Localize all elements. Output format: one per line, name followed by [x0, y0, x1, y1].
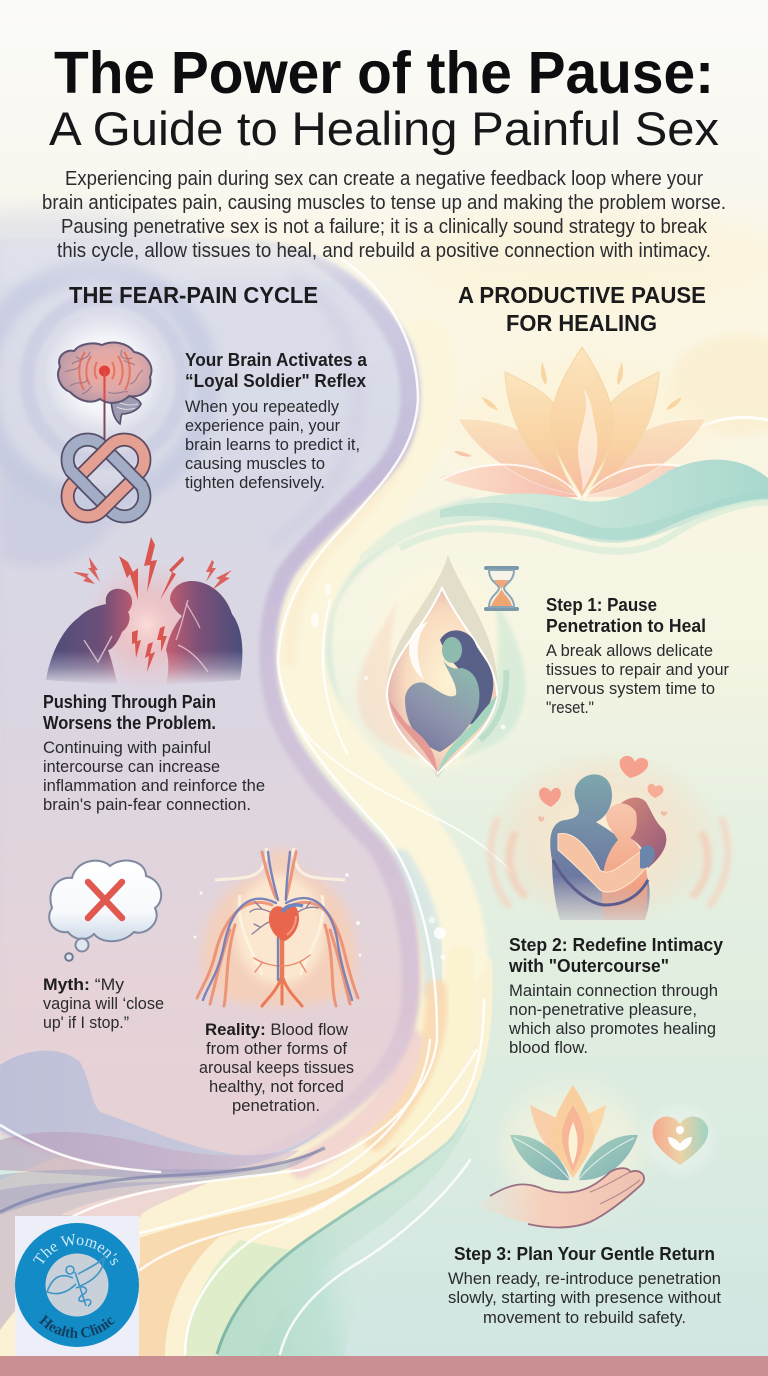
text: brain reflex: “Loyal Soldier" Reflex: [185, 371, 366, 391]
background: watercolor waves at panel foot: [0, 1132, 325, 1215]
text: brain reflex: [185, 350, 368, 492]
text: brain reflex: Your Brain Activates a: [185, 350, 368, 370]
heading: a productive pause for healing: FOR HEALING: [506, 310, 657, 336]
text: step 2: Step 2: Redefine Intimacy: [509, 935, 723, 955]
text: reality: penetration.: [232, 1096, 320, 1115]
text: pushing through pain: Continuing with painful: [43, 738, 211, 757]
icon: circulatory system with heart: [194, 848, 362, 1006]
text: pushing through pain: Pushing Through Pain: [43, 692, 216, 712]
text: myth: up' if I stop.”: [43, 1013, 129, 1032]
text: brain reflex: brain learns to predict it,: [185, 435, 360, 454]
text: step 3: [448, 1244, 721, 1327]
text: step 2: with "Outercourse": [508, 956, 669, 976]
text: reality: arousal keeps tissues: [199, 1058, 354, 1077]
text: step 1: Penetration to Heal: [546, 616, 706, 636]
text: pushing through pain: intercourse can increase: [43, 757, 220, 776]
text: pushing through pain: Worsens the Problem.: [43, 713, 216, 733]
icon: hourglass: [484, 566, 519, 611]
title: [49, 40, 719, 155]
icon: lotus flower with wave: [360, 347, 768, 565]
text: reality: healthy, not forced: [209, 1077, 344, 1096]
icon: woman in protective leaf: [357, 555, 525, 778]
text: step 3: movement to rebuild safety.: [483, 1308, 686, 1327]
text: step 3: slowly, starting with presence without: [448, 1288, 721, 1307]
background: cream and mint ribbon along the S-curve: [290, 345, 476, 1168]
icon: myth thought cloud with X: [49, 861, 161, 961]
heading: a productive pause for healing: A PRODUCTIVE PAUSE: [458, 282, 706, 308]
icon: brain with knot: [43, 313, 167, 525]
icon: heart with figure: [646, 1106, 714, 1174]
text: reality: from other forms of: [206, 1039, 347, 1058]
heading: a productive pause for healing: [458, 282, 706, 336]
logo: The Women's Health Clinic: The Women's: [32, 1234, 118, 1266]
text: brain reflex: causing muscles to: [185, 454, 325, 473]
text: step 1: [546, 595, 729, 717]
title: A Guide to Healing Painful Sex: [49, 102, 719, 155]
text: myth: [43, 975, 164, 1032]
background: teal edge stroke: [217, 1080, 480, 1354]
text: step 1: "reset.": [546, 698, 594, 717]
text: step 1: tissues to repair and your: [546, 660, 729, 679]
text: step 2: blood flow.: [509, 1038, 588, 1057]
text: step 2: which also promotes healing: [508, 1019, 716, 1038]
text: pushing through pain: inflammation and reinforce the: [43, 776, 265, 795]
icon: embracing couple with hearts: [485, 748, 728, 928]
intro paragraph: Pausing penetrative sex is not a failure; it is a clinically sound strategy to break: [61, 215, 708, 238]
footer bar: [0, 1356, 768, 1376]
text: reality: Reality: Blood flow: [205, 1020, 349, 1039]
text: step 3: Step 3: Plan Your Gentle Return: [454, 1244, 715, 1264]
text: brain reflex: experience pain, your: [185, 416, 340, 435]
text: step 1: A break allows delicate: [546, 641, 713, 660]
text: step 2: Maintain connection through: [509, 981, 718, 1000]
text: step 1: Step 1: Pause: [546, 595, 657, 615]
text: pushing through pain: [43, 692, 265, 814]
icon: hand holding lotus: [475, 1085, 644, 1228]
title: The Power of the Pause:: [54, 40, 714, 106]
text: step 2: non-penetrative pleasure,: [509, 1000, 697, 1019]
heading: the fear-pain cycle: THE FEAR-PAIN CYCLE: [69, 282, 318, 308]
logo: The Women's Health Clinic: Health Clinic: [38, 1314, 115, 1338]
intro paragraph: [42, 167, 726, 262]
text: myth: vagina will ‘close: [43, 994, 164, 1013]
logo: The Women's Health Clinic: [15, 1216, 139, 1356]
background: white flowing lines: [0, 255, 768, 1354]
text: myth: Myth: “My: [43, 975, 125, 994]
text: brain reflex: When you repeatedly: [185, 397, 339, 416]
intro paragraph: Experiencing pain during sex can create a negative feedback loop where your: [65, 167, 703, 190]
text: reality: [199, 1020, 354, 1115]
text: step 3: When ready, re-introduce penetration: [448, 1269, 721, 1288]
text: brain reflex: tighten defensively.: [185, 473, 325, 492]
text: step 2: [508, 935, 723, 1057]
icon: couple in pain: [46, 537, 242, 691]
background: left lilac panel: [0, 240, 420, 1173]
text: step 1: nervous system time to: [546, 679, 715, 698]
background: pastel bands curving to the bottom: [0, 900, 510, 1356]
intro paragraph: this cycle, allow tissues to heal, and rebuild a positive connection with intimacy.: [57, 239, 711, 262]
text: pushing through pain: brain's pain-fear connection.: [43, 795, 251, 814]
